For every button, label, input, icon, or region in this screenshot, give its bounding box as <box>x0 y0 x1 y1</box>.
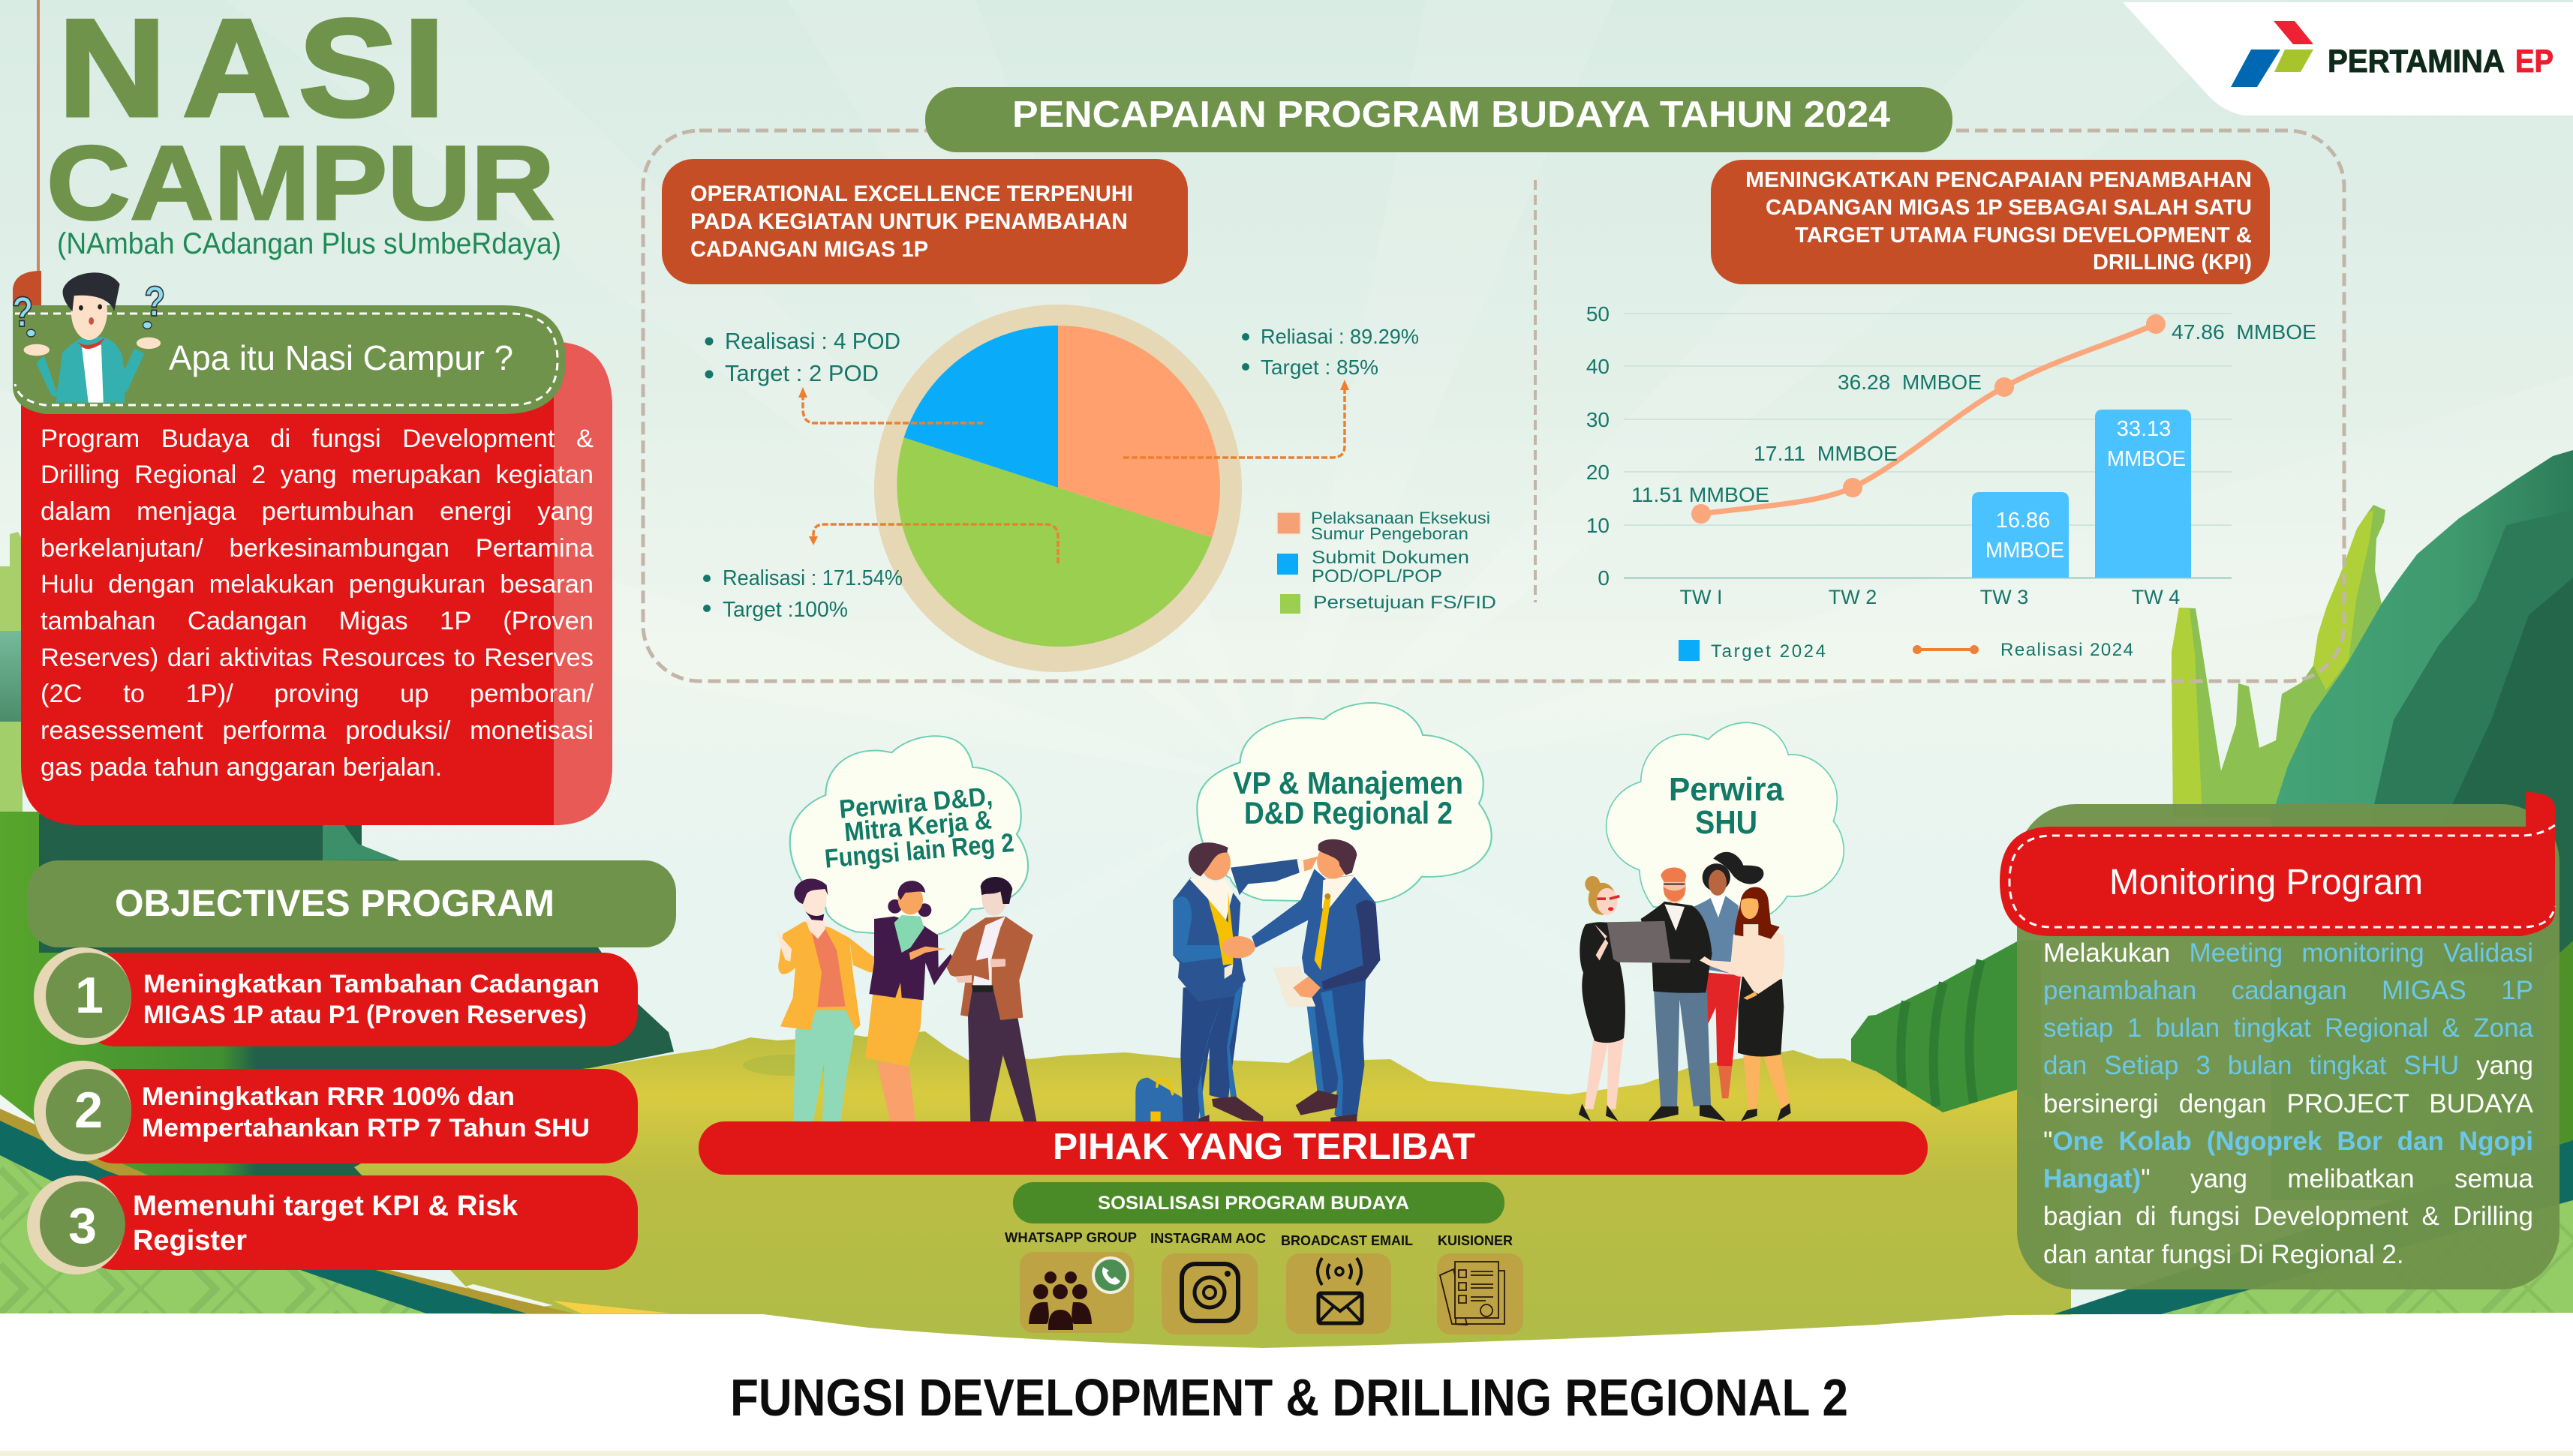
objective 3 <box>27 1175 638 1274</box>
body text: (2C to 1P)/ proving up pemboran/ <box>41 680 594 708</box>
line value labels <box>1631 320 2316 506</box>
dashed panel frame: pencapaian <box>643 131 2344 681</box>
pie chart <box>874 305 1242 672</box>
monitoring banner <box>2000 792 2555 936</box>
monitoring body text: Melakukan Meeting monitoring Validasi <box>2043 938 2533 968</box>
callout: meningkatkan pencapaian: MENINGKATKAN PENCAPAIAN PENAMBAHAN <box>1745 168 2252 192</box>
title: NASI CAMPUR: CAMPUR <box>47 124 555 242</box>
cloud: VP & Manajemen <box>1197 703 1492 902</box>
callout: operational excellence: PADA KEGIATAN UNTUK PENAMBAHAN <box>690 209 1128 234</box>
body text: Reserves) dari aktivitas Resources to Reserves <box>41 644 594 672</box>
banner: pihak yang terlibat <box>699 1121 1928 1175</box>
icon: whatsapp group <box>1005 1230 1137 1333</box>
pill: sosialisasi program budaya: SOSIALISASI PROGRAM BUDAYA <box>1098 1193 1409 1214</box>
people group: VP & Manajemen handshake <box>1135 839 1380 1123</box>
text block: orange slice values: Target : 85% <box>1261 356 1378 379</box>
icon: kuisioner <box>1437 1233 1523 1334</box>
body text <box>41 421 594 788</box>
icon: whatsapp group: WHATSAPP GROUP <box>1005 1230 1137 1245</box>
bar: TW3 target: MMBOE <box>1985 539 2064 563</box>
logo wordmark: PERTAMINA <box>2328 44 2505 80</box>
person: yellow jacket <box>777 878 924 1123</box>
monitoring body text: setiap 1 bulan tingkat Regional & Zona <box>2043 1013 2533 1043</box>
cloud: Perwira D&D: Fungsi lain Reg 2 <box>823 828 1015 874</box>
y axis labels: 40 <box>1586 355 1610 378</box>
line value labels: 47.86 MMBOE <box>2172 320 2316 344</box>
callout: operational excellence: OPERATIONAL EXCELLENCE TERPENUHI <box>690 182 1133 206</box>
monitoring body text: bagian di fungsi Development & Drilling <box>2043 1202 2533 1231</box>
briefcase <box>1135 1078 1197 1123</box>
banner: pihak yang terlibat: PIHAK YANG TERLIBAT <box>1053 1127 1475 1167</box>
cloud: VP & Manajemen: D&D Regional 2 <box>1244 795 1453 830</box>
text block: orange slice values <box>1242 325 1419 379</box>
chart legend <box>1679 640 2133 662</box>
arrow: blue slice to label <box>798 387 983 423</box>
text block: green slice values: Target :100% <box>723 598 848 622</box>
person: brown jacket <box>947 877 1037 1123</box>
heading: pencapaian program budaya: PENCAPAIAN PROGRAM BUDAYA TAHUN 2024 <box>1012 95 1890 135</box>
people group: Perwira D&D <box>777 877 1037 1123</box>
vertical accent line <box>37 0 40 274</box>
x axis labels: TW I <box>1680 586 1722 608</box>
text block: blue slice values: Realisasi : 4 POD <box>725 328 900 354</box>
banner: Apa itu Nasi Campur <box>13 271 566 414</box>
objective 3: Register <box>133 1225 247 1256</box>
line value labels: 36.28 MMBOE <box>1838 371 1982 394</box>
text block: blue slice values <box>705 328 900 386</box>
cloud: Perwira SHU <box>1607 722 1844 914</box>
callout: meningkatkan pencapaian: CADANGAN MIGAS 1P SEBAGAI SALAH SATU <box>1766 196 2252 220</box>
icon: instagram <box>1150 1231 1266 1334</box>
body text: reasessement performa produksi/ monetisasi <box>41 716 594 745</box>
objective 3: Memenuhi target KPI & Risk <box>133 1190 519 1222</box>
white footer band <box>0 1313 2573 1456</box>
scenery: bottom-left strips <box>0 1094 670 1313</box>
arrow: green slice to label <box>809 524 1058 563</box>
icon: confused character: ? <box>144 278 165 325</box>
combo chart: target vs realisasi <box>1586 302 2316 662</box>
arrow: orange slice to label <box>1123 380 1349 458</box>
pie legend: Sumur Pengeboran <box>1311 524 1468 543</box>
bar: TW4 target: MMBOE <box>2107 447 2186 471</box>
scenery: middle striped hill <box>1851 941 2041 1125</box>
text block: green slice values <box>703 566 903 622</box>
pie legend <box>1277 509 1496 614</box>
icon: broadcast email: BROADCAST EMAIL <box>1281 1233 1413 1248</box>
objective 2: Mempertahankan RTP 7 Tahun SHU <box>142 1114 590 1142</box>
cloud: Perwira D&D: Perwira D&D, <box>838 782 993 824</box>
scenery: grass field <box>354 1031 2071 1350</box>
icon: instagram: INSTAGRAM AOC <box>1150 1231 1266 1246</box>
monitoring banner: Monitoring Program <box>2109 863 2423 902</box>
footer title: FUNGSI DEVELOPMENT & DRILLING REGIONAL 2 <box>730 1368 1848 1427</box>
person: purple jacket <box>865 881 953 1123</box>
body text: berkelanjutan/ berkesinambungan Pertamina <box>41 534 594 563</box>
body text: gas pada tahun anggaran berjalan. <box>41 753 442 782</box>
chart legend: Realisasi 2024 <box>2000 640 2133 660</box>
icon: kuisioner: KUISIONER <box>1438 1233 1513 1248</box>
body text: dalam menjaga pertumbuhan energi yang <box>41 497 594 526</box>
line: realisasi 2024 <box>1691 314 2166 524</box>
scenery: left big hill <box>0 812 674 1275</box>
scenery: left spikes <box>0 532 23 813</box>
objective 2 <box>34 1061 638 1163</box>
monitoring body text: "One Kolab (Ngoprek Bor dan Ngopi <box>2043 1127 2533 1156</box>
text block: blue slice values: Target : 2 POD <box>725 360 879 386</box>
chart legend: Target 2024 <box>1711 641 1826 662</box>
pie slice: pelaksanaan eksekusi <box>1058 326 1220 538</box>
cloud: Perwira SHU: SHU <box>1695 804 1757 841</box>
laptop <box>1607 921 1691 963</box>
monitoring body text: penambahan cadangan MIGAS 1P <box>2043 976 2533 1005</box>
x axis labels: TW 2 <box>1829 586 1877 608</box>
banner text: Apa itu Nasi Campur ? <box>169 338 513 377</box>
y axis labels <box>1586 302 1610 590</box>
cloud: Perwira SHU: Perwira <box>1669 771 1784 808</box>
callout: operational excellence <box>662 159 1188 284</box>
person: woman with red glasses <box>1579 876 1625 1121</box>
subtitle: (NAmbah CAdangan Plus sUmbeRdaya) <box>57 227 561 260</box>
scenery: right mountain <box>2271 450 2573 1200</box>
objective 2: Meningkatkan RRR 100% dan <box>142 1082 515 1111</box>
y axis labels: 10 <box>1586 514 1610 537</box>
objective 1: 1 <box>75 967 104 1024</box>
handshake <box>1222 936 1255 958</box>
person: man with laptop <box>1607 867 1726 1121</box>
panel: monitoring program <box>2000 792 2559 1289</box>
icon: broadcast email <box>1281 1233 1413 1334</box>
body text: Program Budaya di fungsi Development & <box>41 425 594 453</box>
cloud: Perwira D&D <box>790 736 1028 937</box>
monitoring body text: Hangat)" yang melibatkan semua <box>2043 1164 2533 1193</box>
panel: Apa itu Nasi Campur description <box>21 342 612 825</box>
person: woman in cream shirt <box>1700 887 1791 1121</box>
text block: green slice values: Realisasi : 171.54% <box>723 566 903 590</box>
objective 1 <box>34 947 638 1046</box>
pill: sosialisasi program budaya <box>1013 1182 1504 1223</box>
body text: tambahan Cadangan Migas 1P (Proven <box>41 607 594 635</box>
monitoring body text <box>2043 935 2533 1280</box>
pie legend: Pelaksanaan Eksekusi <box>1311 509 1490 527</box>
line value labels: 17.11 MMBOE <box>1754 442 1898 465</box>
logo panel: Pertamina EP <box>2123 2 2573 116</box>
cloud: Perwira D&D: Mitra Kerja & <box>843 805 993 847</box>
callout: meningkatkan pencapaian: TARGET UTAMA FUNGSI DEVELOPMENT & <box>1795 224 2252 248</box>
bar: TW3 target <box>1972 492 2069 578</box>
objective 1: MIGAS 1P atau P1 (Proven Reserves) <box>143 1001 587 1029</box>
logo EP: EP <box>2515 44 2553 80</box>
objective 1: Meningkatkan Tambahan Cadangan <box>143 970 600 998</box>
bar: TW4 target <box>2095 410 2191 578</box>
background rays <box>0 0 2573 1125</box>
body text: Hulu dengan melakukan pengukuran besaran <box>41 570 594 599</box>
pie legend: POD/OPL/POP <box>1312 566 1442 587</box>
x axis labels <box>1680 586 2180 608</box>
panel: objectives program <box>27 860 676 1274</box>
callout: meningkatkan pencapaian: DRILLING (KPI) <box>2093 251 2252 275</box>
icon: confused character <box>12 272 165 403</box>
title: NASI CAMPUR <box>47 0 561 260</box>
person: left manager <box>1173 842 1318 1121</box>
scenery: right lower hill <box>2544 941 2573 1170</box>
y axis labels: 0 <box>1598 566 1610 590</box>
scenery: right spikes <box>2172 505 2385 818</box>
text block: orange slice values: Reliasai : 89.29% <box>1261 325 1419 348</box>
y axis labels: 30 <box>1586 408 1610 431</box>
icon: confused character: ? <box>12 289 33 335</box>
line value labels: 11.51 MMBOE <box>1631 483 1769 506</box>
y axis labels: 20 <box>1586 461 1610 484</box>
y axis labels: 50 <box>1586 302 1610 326</box>
person: right manager <box>1252 839 1380 1121</box>
icon: Pertamina logo mark <box>2231 21 2313 87</box>
callout: operational excellence: CADANGAN MIGAS 1P <box>690 237 928 262</box>
callout: meningkatkan pencapaian <box>1711 160 2270 284</box>
scenery: right bottom strips <box>2054 1140 2573 1314</box>
monitoring body text: dan Setiap 3 bulan tingkat SHU yang <box>2043 1051 2533 1080</box>
objectives heading bar <box>27 860 676 947</box>
body text: Drilling Regional 2 yang merupakan kegiatan <box>41 461 594 489</box>
objectives heading bar: OBJECTIVES PROGRAM <box>115 882 555 924</box>
cloud: VP & Manajemen: VP & Manajemen <box>1233 765 1463 800</box>
people group: Perwira SHU <box>1579 852 1791 1121</box>
monitoring body text: dan antar fungsi Di Regional 2. <box>2043 1240 2404 1269</box>
person: red pants woman <box>1687 852 1763 1098</box>
x axis labels: TW 4 <box>2132 586 2180 608</box>
bar: TW4 target: 33.13 <box>2117 417 2171 441</box>
pie slice: submit dokumen <box>904 326 1058 488</box>
objective 2: 2 <box>74 1082 103 1139</box>
monitoring body text: bersinergi dengan PROJECT BUDAYA <box>2043 1089 2533 1118</box>
bar: TW3 target: 16.86 <box>1996 509 2050 533</box>
heading: pencapaian program budaya <box>925 87 1952 152</box>
x axis labels: TW 3 <box>1980 586 2028 608</box>
objective 3: 3 <box>68 1197 97 1254</box>
pie legend: Persetujuan FS/FID <box>1313 593 1496 613</box>
pie slice: persetujuan FS/FID <box>897 437 1212 647</box>
pie legend: Submit Dokumen <box>1312 548 1469 568</box>
